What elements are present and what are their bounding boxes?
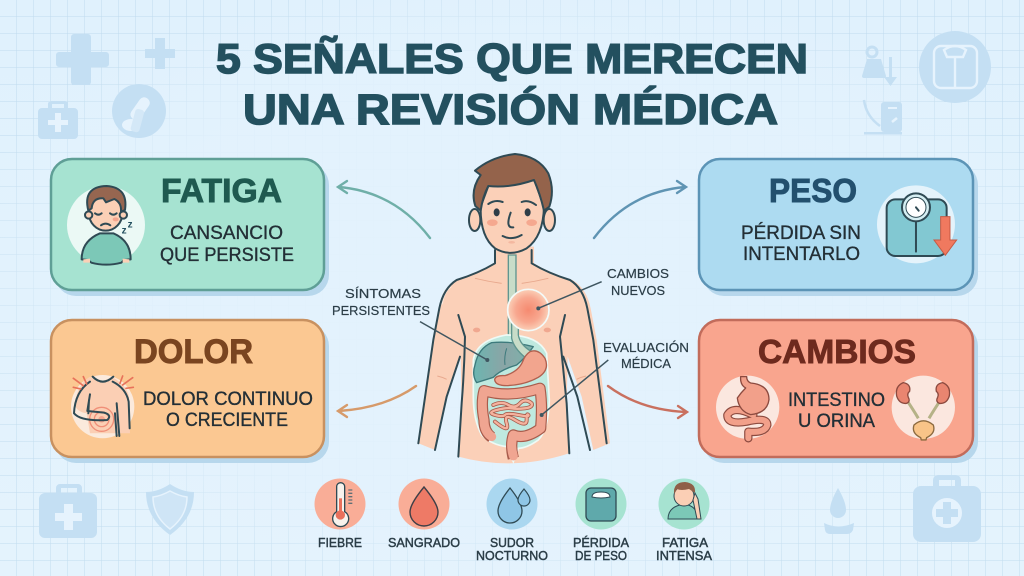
text: cansancio que persiste: [160, 223, 294, 266]
label: evaluación médica: [603, 340, 689, 371]
item: sudor nocturno: [476, 478, 548, 563]
title: [216, 35, 808, 134]
label: síntomas persistentes: PERSISTENTES: [332, 304, 430, 318]
heading: cambios: CAMBIOS: [758, 333, 916, 370]
large intestine: [482, 388, 542, 458]
icon: kidneys and bladder: [892, 376, 955, 440]
abdomen organs: [473, 320, 549, 462]
small intestine: [491, 400, 532, 428]
card: peso: [699, 159, 978, 296]
arrow: to cambios: [608, 386, 687, 418]
text: dolor continuo o creciente: [143, 389, 313, 431]
item: sudor nocturno: NOCTURNO: [476, 548, 548, 563]
text: dolor continuo o creciente: O CRECIENTE: [166, 410, 288, 431]
head: [469, 154, 555, 253]
arrow: to peso: [594, 181, 686, 238]
label: síntomas persistentes: [332, 286, 430, 318]
esophagus lower: [512, 320, 532, 357]
item: sangrado: [388, 478, 460, 550]
label: síntomas persistentes: SÍNTOMAS: [345, 286, 421, 301]
heading: peso: PESO: [769, 172, 857, 209]
item: fiebre: [314, 478, 366, 550]
item: pérdida de peso: [573, 478, 629, 563]
item: sudor nocturno: SUDOR: [490, 535, 534, 550]
title: UNA REVISIÓN MÉDICA: [243, 85, 778, 134]
item: fiebre: FIEBRE: [318, 535, 362, 550]
text: dolor continuo o creciente: DOLOR CONTINUO: [143, 389, 313, 410]
text: cansancio que persiste: CANSANCIO: [170, 223, 283, 244]
item: pérdida de peso: DE PESO: [575, 548, 627, 563]
label: evaluación médica: EVALUACIÓN: [603, 340, 689, 355]
label: evaluación médica: MÉDICA: [621, 356, 672, 371]
text: pérdida sin intentarlo: PÉRDIDA SIN: [741, 223, 861, 244]
central human figure: [418, 154, 610, 463]
item: fatiga intensa: INTENSA: [656, 548, 712, 563]
heading: fatiga: FATIGA: [161, 172, 282, 209]
label: cambios nuevos: CAMBIOS: [607, 267, 669, 281]
icon: scale with down arrow: [877, 185, 957, 263]
title: 5 SEÑALES QUE MERECEN: [216, 35, 808, 82]
text: pérdida sin intentarlo: INTENTARLO: [743, 244, 860, 265]
icon: tired person: [67, 186, 145, 265]
text: intestino u orina: INTESTINO: [788, 390, 885, 411]
card: dolor: [51, 320, 329, 463]
leader lines: [420, 282, 608, 415]
card: fatiga: [51, 159, 329, 296]
label: cambios nuevos: [607, 267, 669, 298]
icon row: warning symptoms: [314, 478, 712, 563]
body: [418, 247, 610, 463]
item: fatiga intensa: [656, 478, 712, 563]
item: sangrado: SANGRADO: [388, 535, 460, 550]
icon: chest pain: [71, 375, 134, 438]
stomach: [495, 351, 546, 386]
heading: dolor: DOLOR: [134, 333, 253, 371]
arrow: to dolor: [338, 386, 416, 417]
item: fatiga intensa: FATIGA: [662, 535, 708, 550]
liver: [474, 342, 533, 383]
icon: stomach and intestine: [716, 376, 779, 439]
highlighted spot: [508, 289, 549, 331]
esophagus: [508, 255, 528, 355]
arrow: to fatiga: [338, 181, 430, 238]
text: intestino u orina: U ORINA: [798, 411, 875, 432]
icon: tired person: z: [128, 219, 133, 230]
text: intestino u orina: [788, 390, 885, 432]
text: pérdida sin intentarlo: [741, 223, 861, 265]
item: pérdida de peso: PÉRDIDA: [573, 535, 629, 550]
label: cambios nuevos: NUEVOS: [611, 284, 665, 298]
card: cambios: [699, 320, 978, 463]
text: cansancio que persiste: QUE PERSISTE: [160, 245, 294, 266]
icon: tired person: z: [122, 225, 127, 236]
abdomen highlight: [473, 335, 549, 462]
